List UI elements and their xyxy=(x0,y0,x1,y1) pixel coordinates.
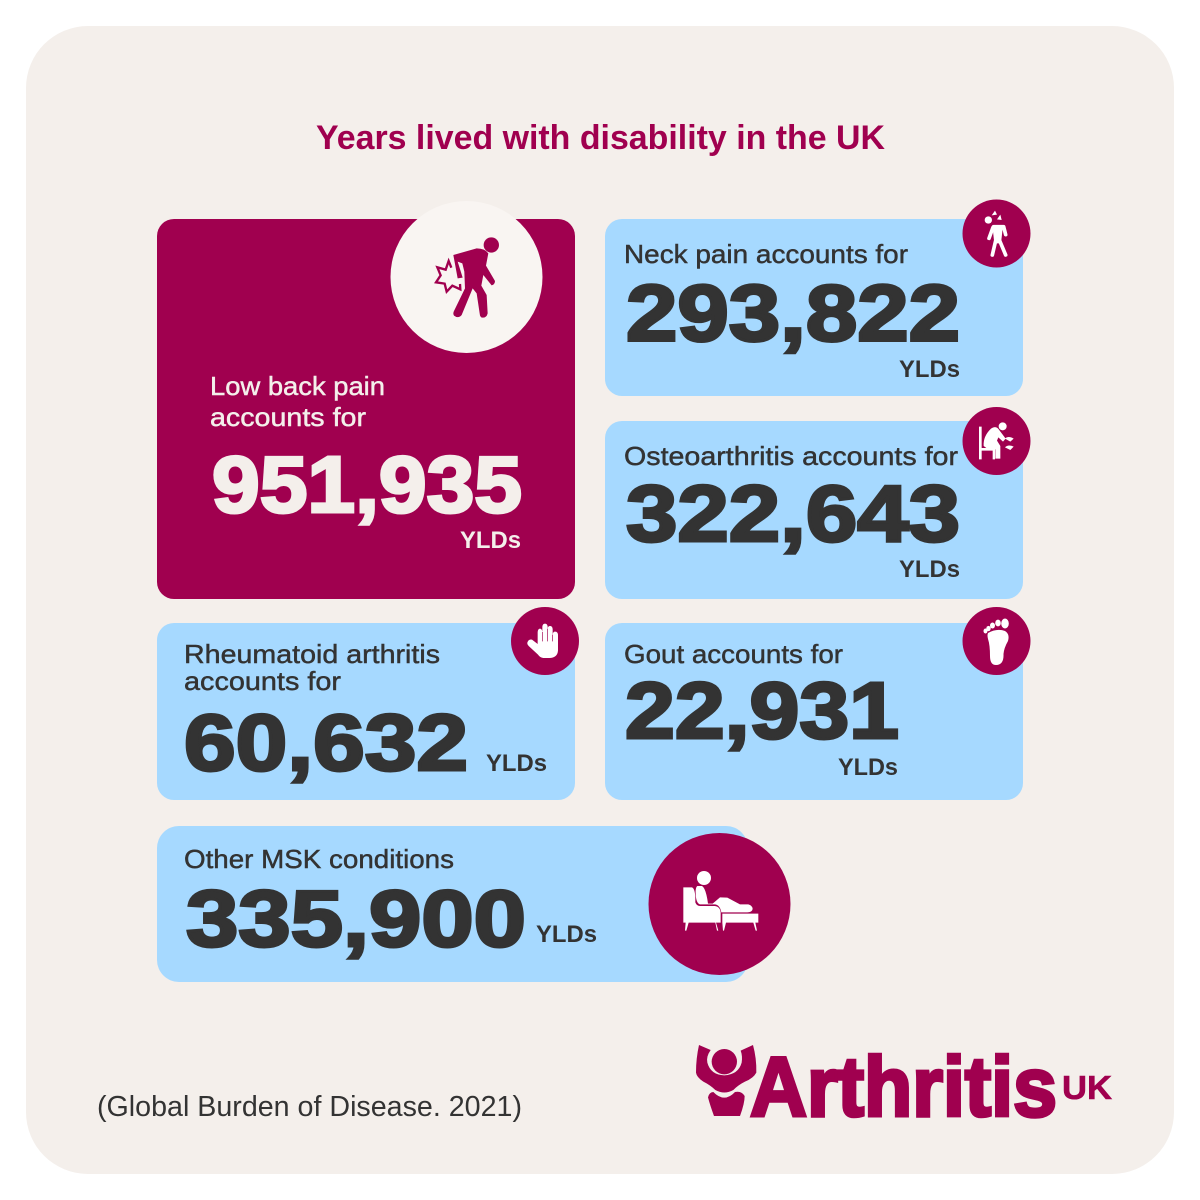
label: accounts for xyxy=(210,402,366,432)
number: 60,632 xyxy=(184,698,468,787)
panel: rheumatoid arthritis xyxy=(157,607,579,800)
unit: YLDs xyxy=(899,556,960,583)
label xyxy=(184,639,440,696)
icon: osteoarthritis xyxy=(962,407,1030,475)
icon: hand xyxy=(511,607,579,675)
label: Other MSK conditions xyxy=(184,844,454,874)
panel: neck pain xyxy=(605,200,1030,396)
number: 322,643 xyxy=(626,469,960,558)
panel: other MSK conditions xyxy=(157,826,790,982)
unit: YLDs xyxy=(536,921,597,948)
icon: reclining person xyxy=(648,833,790,975)
icon: low back pain xyxy=(390,201,542,353)
logo suffix: UK xyxy=(1062,1069,1112,1106)
unit: YLDs xyxy=(460,527,521,554)
label: accounts for xyxy=(184,666,341,696)
label: Low back pain xyxy=(210,371,385,401)
panel: osteoarthritis xyxy=(605,407,1030,599)
title: Years lived with disability in the UK xyxy=(316,119,885,157)
label: Neck pain accounts for xyxy=(624,239,908,269)
panel: low back pain xyxy=(157,201,575,599)
panel: gout xyxy=(605,607,1030,800)
number: 335,900 xyxy=(186,874,526,963)
logo emblem xyxy=(696,1045,756,1116)
icon: neck pain xyxy=(962,200,1030,268)
label: Osteoarthritis accounts for xyxy=(624,441,958,471)
label: Gout accounts for xyxy=(624,639,843,669)
label xyxy=(210,371,385,432)
number: 22,931 xyxy=(625,666,899,755)
unit: YLDs xyxy=(899,356,960,383)
icon: foot xyxy=(962,607,1030,675)
label: Rheumatoid arthritis xyxy=(184,639,440,669)
unit: YLDs xyxy=(486,750,547,777)
number: 951,935 xyxy=(212,440,522,529)
logo wordmark: Arthritis xyxy=(750,1040,1057,1134)
logo: Arthritis UK xyxy=(696,1040,1112,1134)
unit: YLDs xyxy=(838,754,898,781)
number: 293,822 xyxy=(626,268,960,358)
source note: (Global Burden of Disease. 2021) xyxy=(97,1091,522,1123)
